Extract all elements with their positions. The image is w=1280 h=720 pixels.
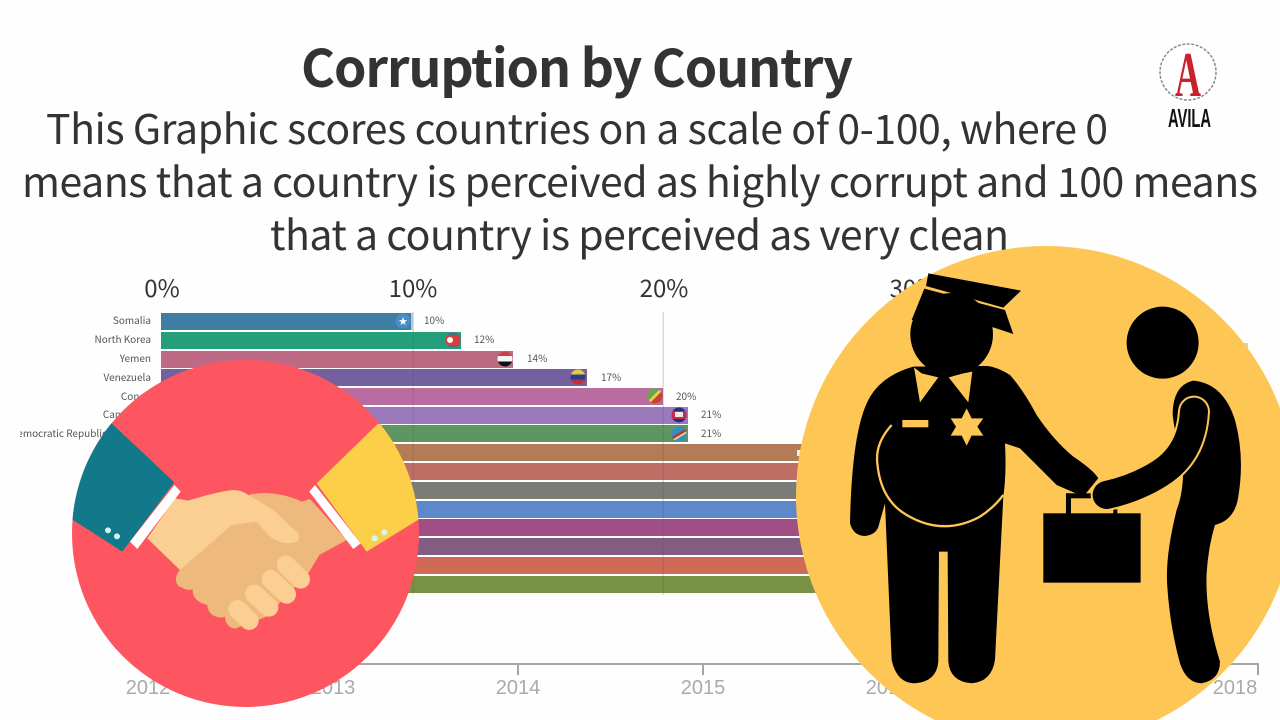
- small grey mark: [1243, 343, 1248, 351]
- icon: flag North Korea: [446, 332, 460, 348]
- percent axis labels: 20%: [640, 269, 688, 304]
- country labels: Democratic Republic of Congo: [10, 425, 151, 440]
- icon: police officer taking bribe in yellow circle: [796, 246, 1280, 720]
- year axis: 2016: [866, 677, 910, 699]
- percent axis labels: 30%: [890, 269, 938, 304]
- value labels: 21%: [701, 406, 721, 421]
- percent axis labels: 10%: [389, 269, 437, 304]
- year axis: 2017: [1051, 677, 1095, 699]
- citizen: [1107, 307, 1241, 683]
- value labels: 10%: [424, 312, 444, 327]
- fingers: [238, 565, 301, 621]
- briefcase: [1043, 493, 1141, 583]
- icon: flag Venezuela: [570, 370, 586, 384]
- value labels: 12%: [474, 331, 494, 346]
- value labels: 17%: [601, 369, 621, 384]
- value labels: [424, 312, 721, 440]
- subtitle text block: that a country is perceived as very clean: [270, 202, 1009, 262]
- bar chart: corruption score by country: [10, 312, 841, 595]
- country labels: [20, 316, 150, 440]
- logo: Avila: A: [1175, 39, 1201, 110]
- logo: Avila: [1160, 39, 1216, 133]
- title: Corruption by Country: [301, 27, 853, 102]
- icon: flag Somalia: [396, 314, 410, 328]
- bars: [161, 313, 841, 593]
- country labels: Congo: [121, 388, 151, 403]
- teal sleeve: [72, 423, 174, 552]
- country labels: North Korea: [95, 331, 151, 346]
- yellow sleeve: [317, 423, 427, 552]
- year axis: [126, 663, 1259, 699]
- icon: handshake in red circle: [60, 360, 427, 707]
- country labels: Somalia: [113, 312, 151, 327]
- icon: flag Congo: [648, 388, 662, 404]
- subtitle text block: [22, 96, 1258, 262]
- year axis: 2012: [126, 677, 170, 699]
- year axis: 2014: [496, 677, 540, 699]
- percent axis labels: 0%: [144, 269, 180, 304]
- light hand: [147, 490, 299, 570]
- percent axis labels: [144, 269, 938, 304]
- year axis: 2013: [311, 677, 355, 699]
- cuff buttons: [105, 527, 387, 541]
- country labels: Venezuela: [104, 369, 151, 384]
- white shirt cuffs: [130, 485, 181, 549]
- value labels: 21%: [701, 425, 721, 440]
- gridlines: [412, 312, 664, 595]
- officer: [850, 273, 1098, 683]
- value labels: 20%: [676, 388, 696, 403]
- icon: flag Somalia: ★: [398, 315, 408, 328]
- dark hand: [176, 493, 347, 629]
- year axis: 2015: [681, 677, 725, 699]
- country labels: Yemen: [119, 350, 151, 365]
- subtitle text block: means that a country is perceived as highly corrupt and 100 means: [22, 149, 1258, 209]
- logo: Avila: AVILA: [1168, 103, 1211, 133]
- country labels: Cambodia: [103, 406, 151, 421]
- icon: flag Yemen: [498, 352, 512, 366]
- icon: flag Cambodia: [672, 408, 686, 422]
- icon: flag DR Congo: [672, 426, 686, 442]
- value labels: 14%: [527, 350, 547, 365]
- subtitle text block: This Graphic scores countries on a scale of 0-100, where 0: [46, 96, 1108, 156]
- year axis: 2018: [1213, 677, 1257, 699]
